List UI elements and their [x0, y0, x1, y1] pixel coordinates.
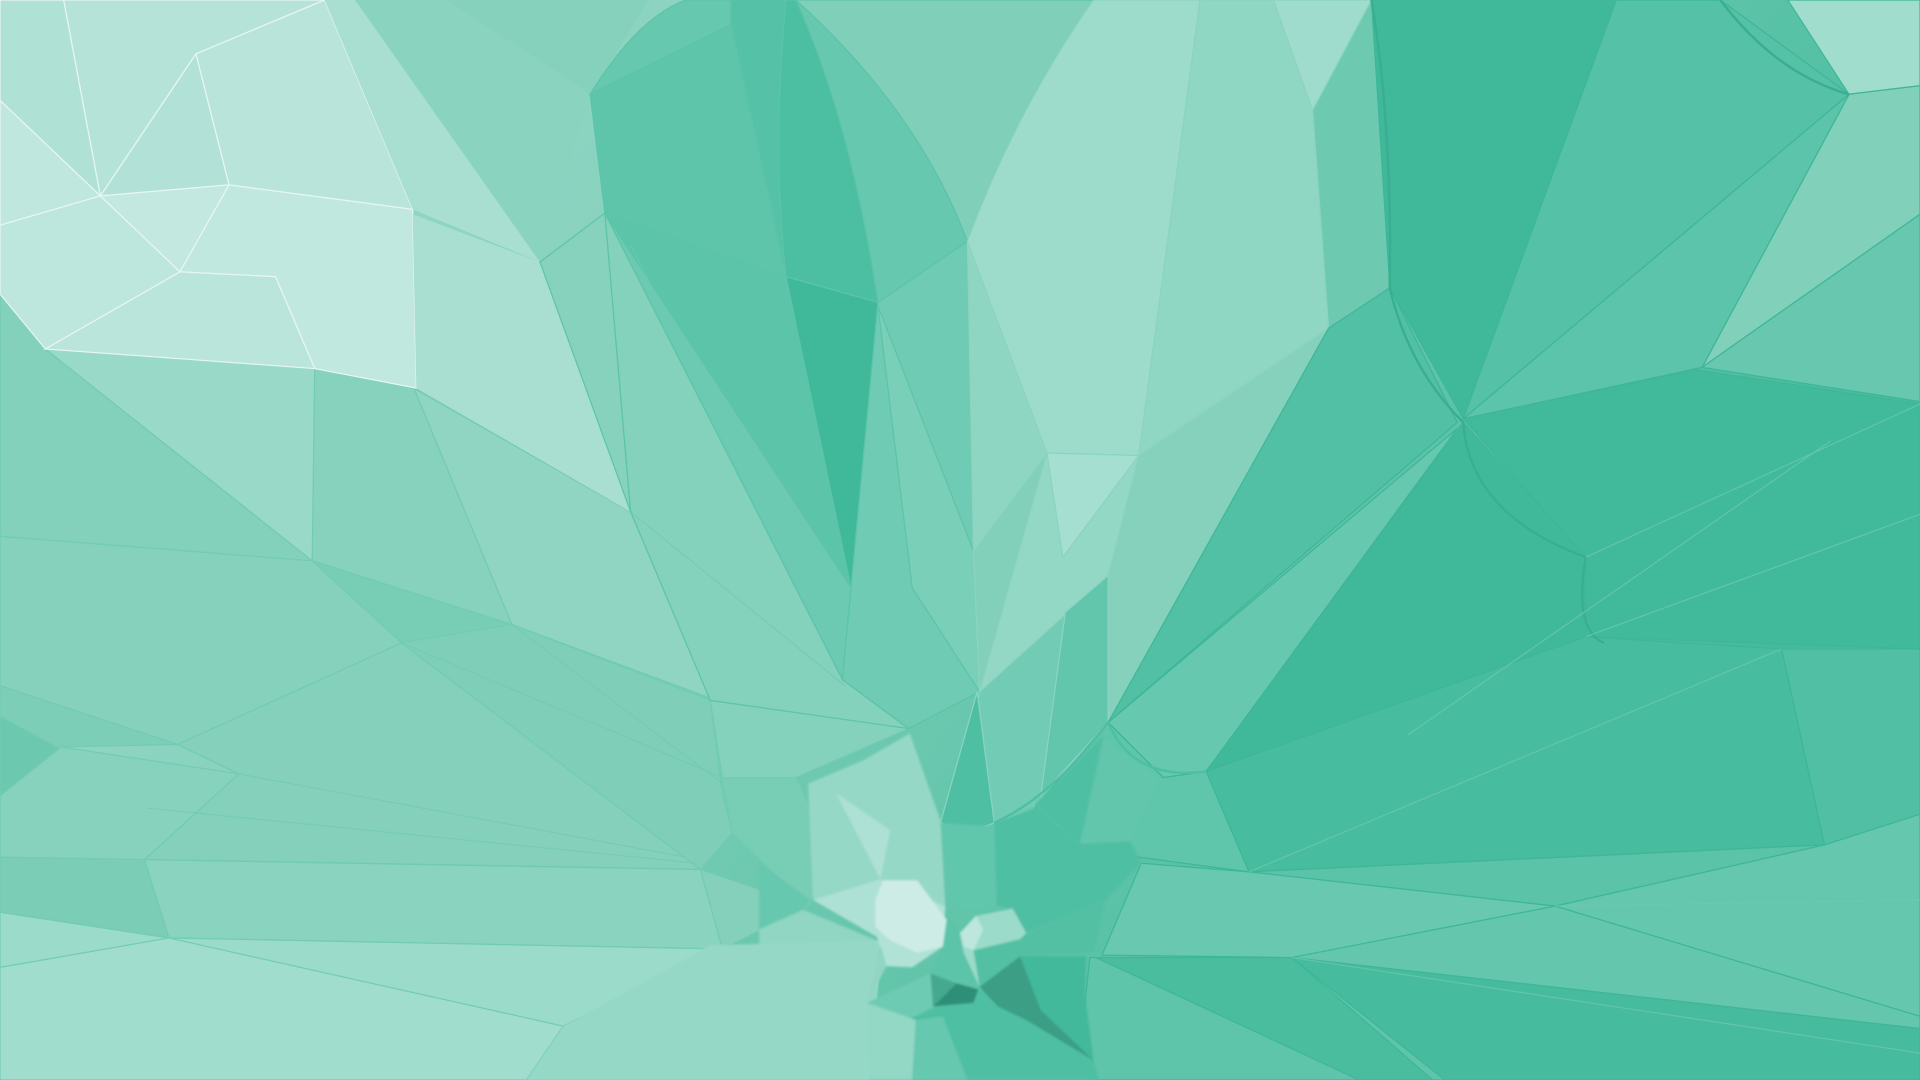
- panel: focal cluster: [527, 733, 1160, 1080]
- panel: top-centre facets: [540, 0, 1093, 729]
- curved facet edges: [994, 0, 1849, 823]
- faint fan lines: [144, 245, 1920, 1053]
- panel: lower-left facets: [0, 294, 909, 1080]
- panel: top-left light facets: [0, 0, 416, 388]
- panel: right facets: [1035, 0, 1920, 1080]
